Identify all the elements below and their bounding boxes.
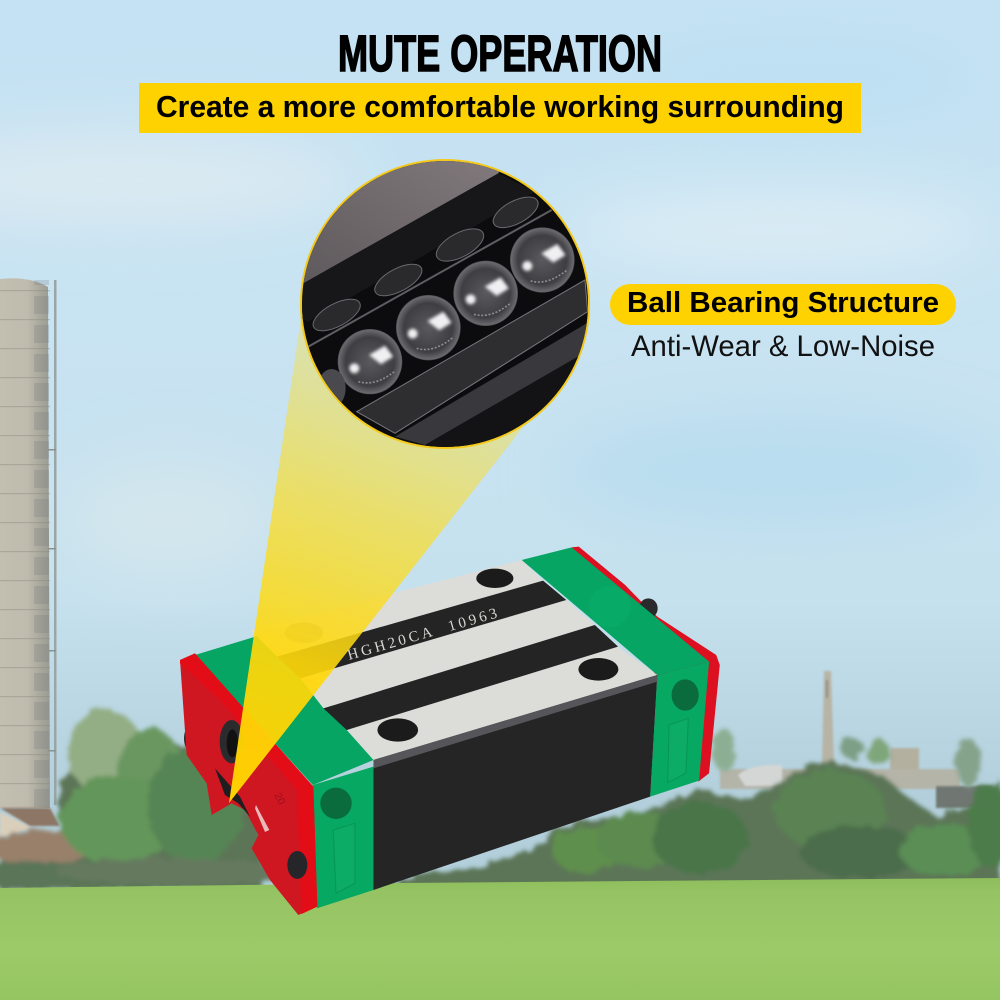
model marking: HGH20CA 10963: [346, 606, 499, 664]
red rim: [180, 653, 317, 914]
subtitle banner: [139, 83, 861, 133]
grease nipple: [589, 586, 631, 627]
body bevel: [373, 675, 657, 768]
magnifier beam: [229, 318, 538, 803]
right green hole: [672, 679, 699, 711]
plate holes: [476, 569, 513, 588]
left end screw behind: [184, 726, 197, 751]
socket screw: [220, 720, 244, 763]
center cut-out rollers: [215, 768, 250, 817]
linear guide carriage block: [180, 547, 720, 915]
black stripes: [277, 581, 566, 678]
speckled dark base: [425, 356, 578, 447]
retainer line: [308, 210, 552, 347]
rail lower gray band: [395, 323, 587, 445]
magnified ball bearing close-up: [295, 155, 595, 455]
callout: ball bearing structure: [610, 284, 956, 363]
right end screw: [639, 598, 658, 618]
tower under scaffolding: [0, 278, 56, 808]
left green section top: [195, 630, 373, 785]
rail edge: [357, 280, 588, 433]
left green front: [313, 767, 373, 908]
tree line: [0, 710, 1000, 890]
subtitle banner: Create a more comfortable working surrounding: [156, 89, 844, 124]
right green recess: [668, 718, 688, 783]
left green hole: [320, 788, 352, 819]
callout: ball bearing structure: Ball Bearing Structure: [627, 287, 939, 319]
dark housing band: [302, 173, 535, 322]
title: MUTE OPERATION: [338, 25, 662, 82]
four steel balls: [318, 227, 575, 408]
left green recess: [333, 823, 355, 893]
distant factory buildings: [0, 671, 992, 838]
housing gray surface: [304, 161, 500, 283]
callout: ball bearing structure: Anti-Wear & Low-Noise: [631, 330, 935, 363]
grass field: [0, 878, 1000, 1000]
upper row of small balls: [308, 191, 543, 337]
silver plates: [250, 560, 543, 657]
end cap mark: 20: [271, 791, 288, 807]
end cap label: [255, 805, 269, 832]
right green section front: [650, 662, 709, 797]
end cap screw: [287, 851, 307, 879]
left red end cap: [180, 653, 317, 915]
black body front face: [373, 675, 657, 890]
right end cap: red: [572, 547, 720, 782]
right green section top: [522, 547, 709, 675]
